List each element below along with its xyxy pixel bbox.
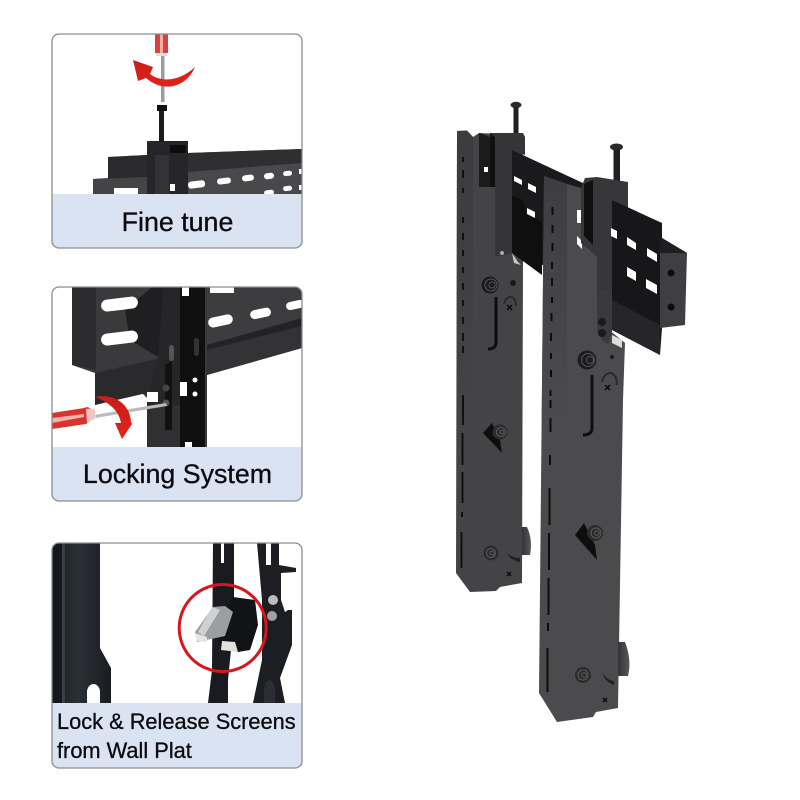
screwdriver [155, 33, 168, 102]
bracket parts [72, 287, 305, 447]
knob upper [482, 276, 498, 294]
front bracket band [611, 200, 687, 355]
mounting bar [93, 141, 303, 196]
panel border [52, 287, 302, 501]
middle rail [208, 543, 234, 703]
rail slots [462, 157, 463, 568]
rear bracket band [512, 150, 585, 290]
right rail [539, 176, 629, 722]
j-slot [583, 375, 592, 435]
left rail [456, 130, 531, 592]
panel border [52, 34, 302, 248]
bracket slots [611, 228, 657, 294]
tab [602, 373, 617, 385]
left rail [52, 543, 111, 703]
panel: lock and release [52, 543, 302, 768]
right upright plate [581, 177, 628, 348]
caption: wall plate: from Wall Plat [57, 738, 192, 763]
end cap [660, 238, 687, 328]
knob wedge [575, 523, 597, 560]
callout circle [179, 584, 266, 672]
rail slots [548, 207, 552, 692]
slots [100, 287, 305, 447]
caption band [52, 447, 302, 501]
caption band [52, 703, 302, 768]
icon: red arrow [95, 396, 132, 439]
right rail [253, 543, 296, 703]
caption: fine tune: Fine tune [122, 207, 233, 237]
caption: lock and release: Lock & Release Screens [57, 709, 296, 734]
latch [195, 597, 258, 652]
knob upper [578, 350, 596, 370]
icon: red arrow [133, 60, 195, 87]
knob wedge [483, 423, 502, 453]
screwdriver [52, 403, 167, 429]
j-slot [488, 297, 496, 349]
product: mounting rails [456, 102, 687, 722]
caption: locking system: Locking System [83, 459, 272, 489]
right screw [610, 144, 623, 181]
panel: fine tune [52, 33, 303, 248]
left screw [510, 102, 522, 134]
tab [504, 297, 516, 306]
caption band [52, 194, 302, 248]
panel border [52, 543, 302, 768]
panel: locking system [52, 287, 305, 501]
left upright plate [490, 133, 525, 265]
side bump [522, 527, 531, 555]
side bump [618, 642, 629, 676]
bolt [157, 105, 167, 142]
